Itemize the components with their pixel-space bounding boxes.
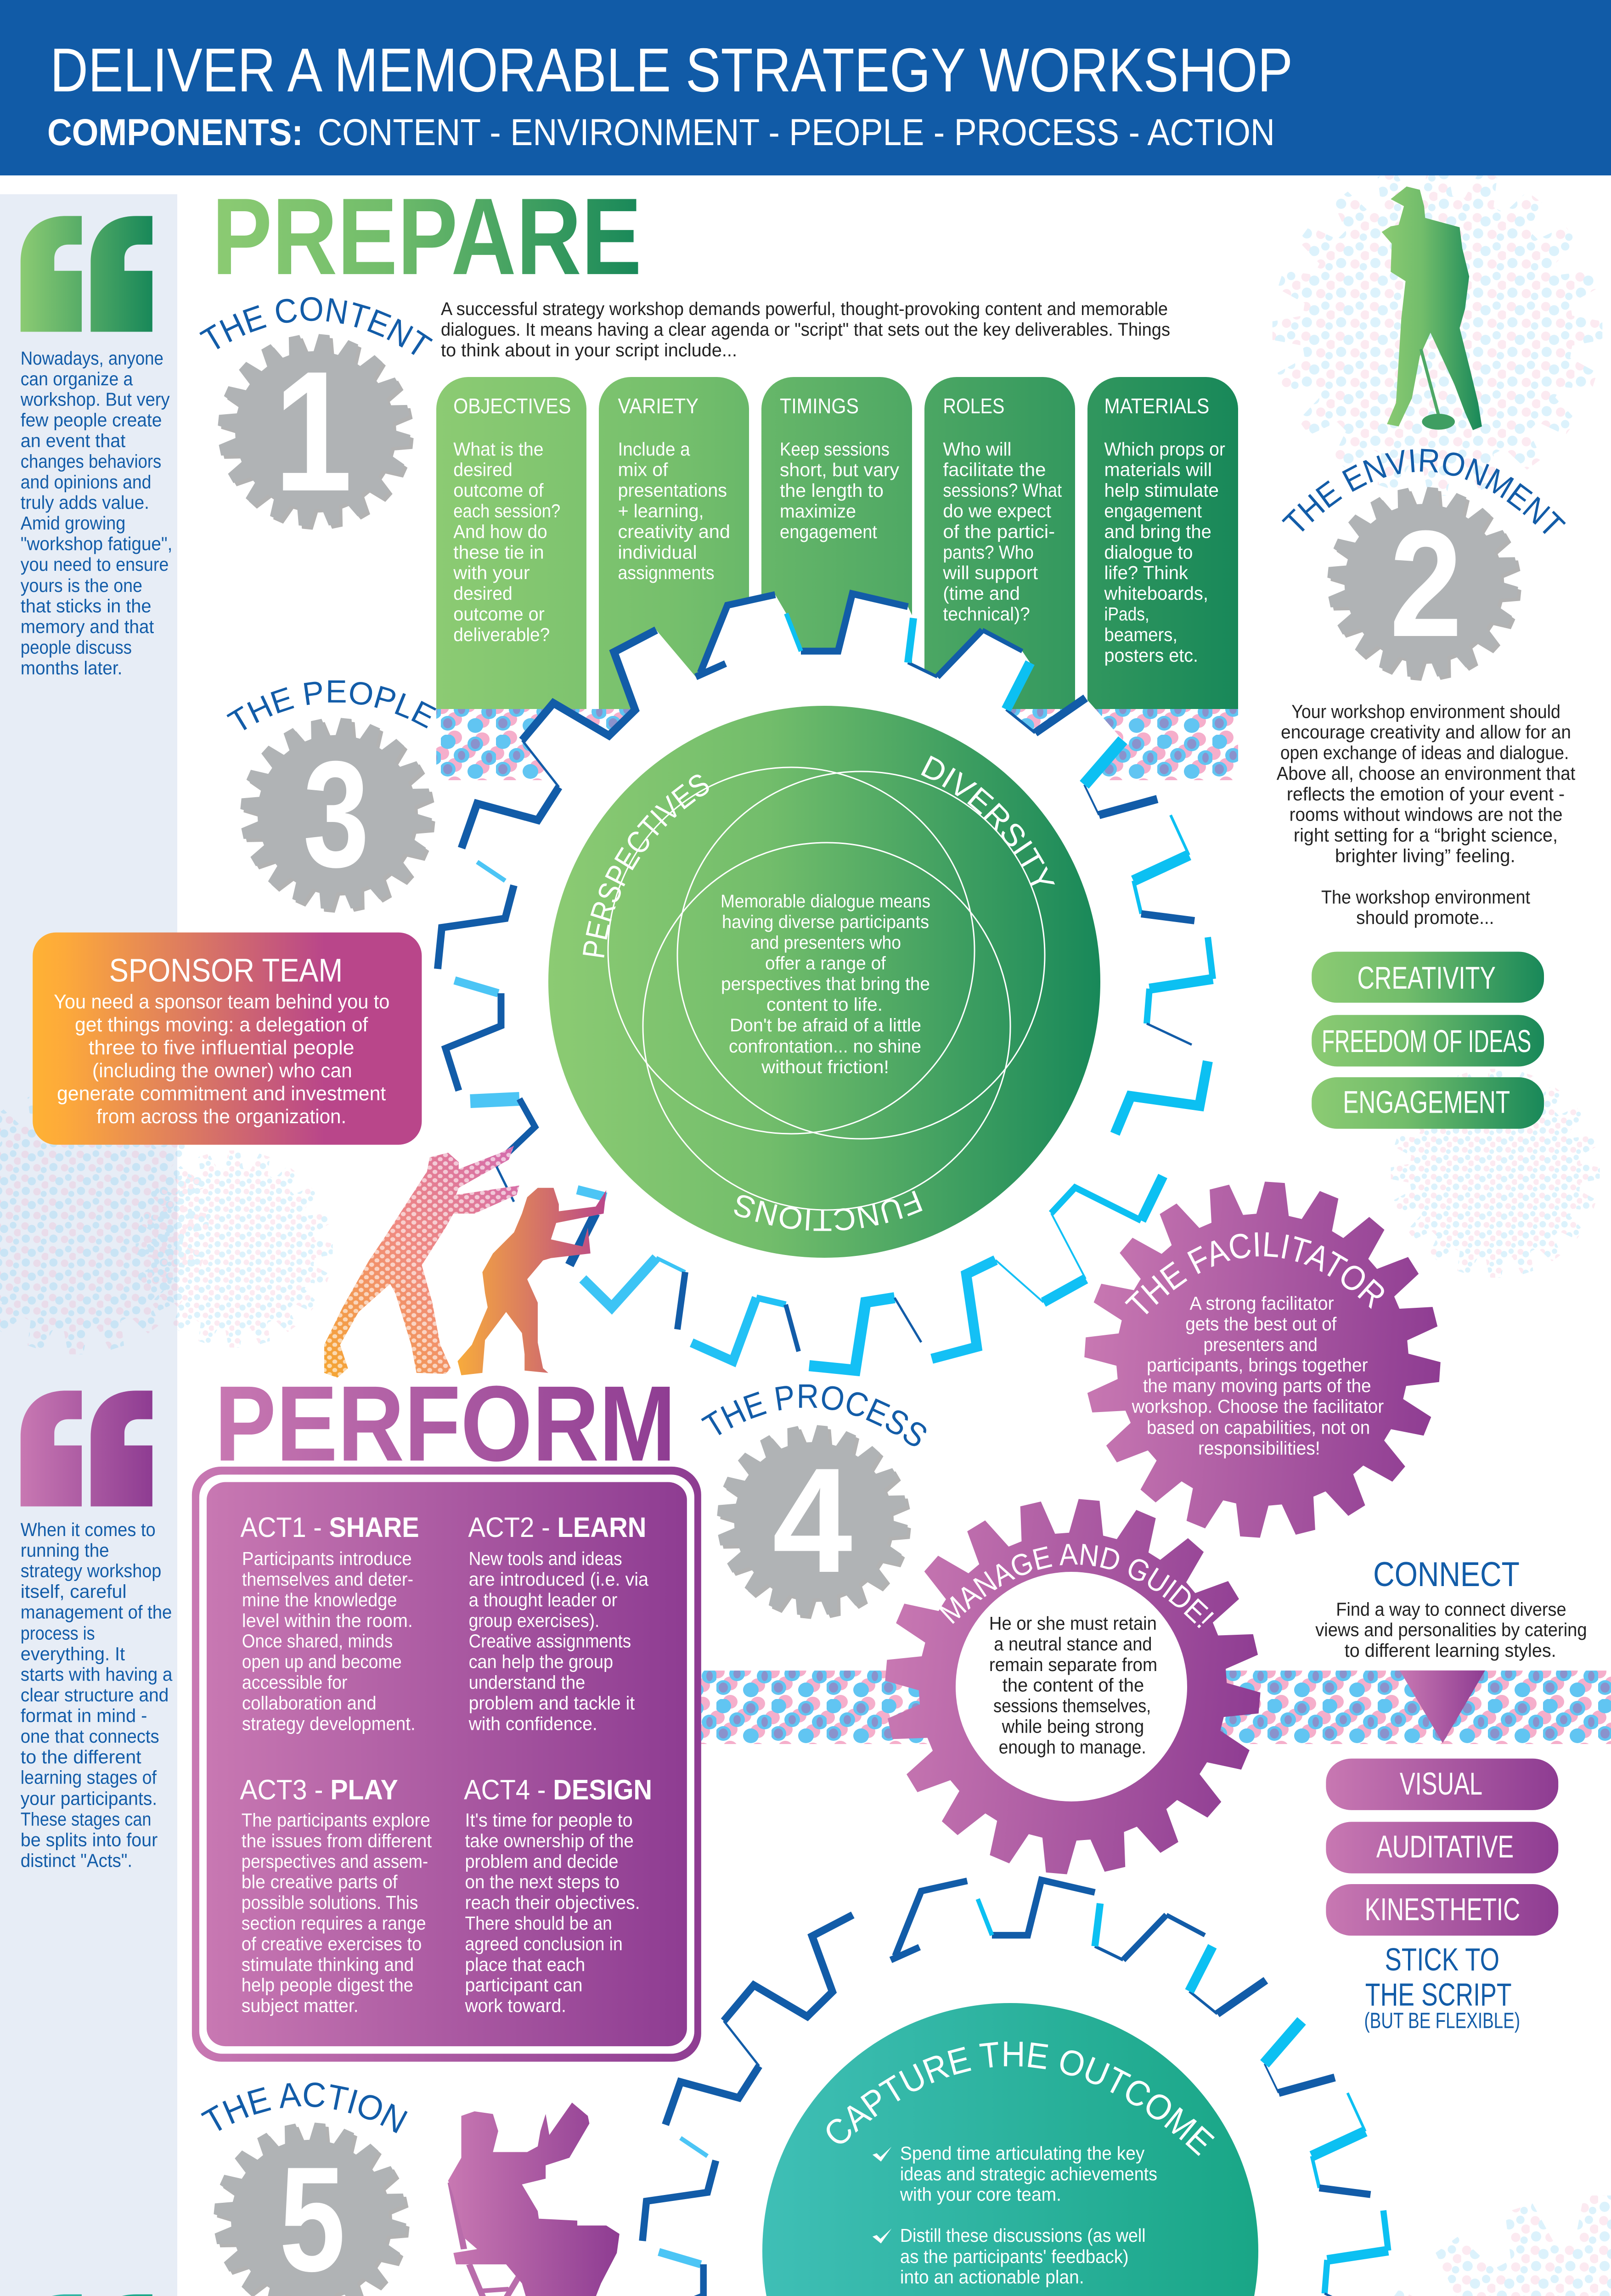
stick to the script (1364, 1941, 1520, 2033)
circle body text (721, 891, 930, 1077)
silhouette: pushing man (dotted) (324, 1146, 519, 1378)
prepare sidebar text: memory and that (21, 617, 154, 637)
prepare sidebar text: few people create (21, 410, 162, 431)
prepare sidebar text: and opinions and (21, 472, 151, 493)
manage and guide gear: the content of the (1003, 1675, 1144, 1696)
act 2: can help the group (469, 1652, 613, 1672)
act 3 (240, 1774, 432, 2016)
act 4: take ownership of the (465, 1831, 634, 1851)
pill: creativity: CREATIVITY (1357, 961, 1496, 996)
card: variety: VARIETY (618, 395, 698, 418)
card: variety: assignments (618, 563, 715, 584)
card: materials: Which props or (1104, 439, 1225, 460)
silhouette: man on director chair (448, 2103, 620, 2296)
card: materials: help stimulate (1104, 480, 1219, 501)
silhouette: pushing woman (457, 1188, 606, 1375)
sponsor team box: three to five influential people (89, 1036, 354, 1058)
checklist: into an actionable plan. (900, 2266, 1084, 2288)
circle body text: having diverse participants (722, 912, 929, 932)
checklist: Spend time articulating the key (900, 2143, 1144, 2164)
big green circle: the people (548, 706, 1100, 1258)
pill: engagement: ENGAGEMENT (1343, 1085, 1510, 1120)
card: objectives: with your (453, 563, 530, 584)
circle body text: offer a range of (765, 953, 886, 974)
heading: prepare: PREPARE (212, 175, 642, 298)
card: timings: engagement (780, 521, 878, 542)
act 4: reach their objectives. (465, 1892, 640, 1913)
prepare sidebar text (20, 348, 172, 679)
facilitator gear: the many moving parts of the (1143, 1376, 1371, 1396)
act 1: level within the room. (242, 1610, 413, 1631)
perform sidebar text: be splits into four (21, 1830, 158, 1851)
header banner (0, 0, 1611, 175)
checklist: ideas and strategic achievements (900, 2163, 1157, 2184)
facilitator gear: gets the best out of (1185, 1314, 1337, 1334)
perform sidebar text (21, 1519, 173, 1871)
prepare sidebar text: truly adds value. (21, 492, 149, 513)
perform sidebar text: to the different (21, 1747, 141, 1767)
card: roles: of the partici- (943, 522, 1055, 542)
card: timings: short, but vary (780, 459, 899, 480)
pill: creativity (1312, 951, 1544, 1003)
card: objectives: And how do (453, 522, 547, 542)
card: objectives: these tie in (453, 542, 544, 563)
facilitator gear (1073, 1170, 1452, 1549)
left sidebar panel (0, 194, 177, 2296)
act 3: ble creative parts of (242, 1872, 398, 1893)
act 4: problem and decide (465, 1851, 619, 1872)
card: objectives: outcome or (453, 604, 545, 625)
act 4: work toward. (465, 1996, 566, 2016)
stick to the script: THE SCRIPT (1365, 1977, 1512, 2012)
card: roles: ROLES (943, 395, 1004, 418)
circle body text: without friction! (761, 1057, 889, 1077)
card: materials: and bring the (1104, 522, 1211, 542)
intro text (441, 299, 1170, 360)
sponsor team box: get things moving: a delegation of (75, 1013, 368, 1035)
gear 4: the process: THE PROCESS (697, 1377, 935, 1456)
prepare sidebar text: Nowadays, anyone (21, 348, 163, 369)
card: objectives: deliverable? (453, 625, 550, 645)
facilitator gear: responsibilities! (1198, 1438, 1320, 1459)
card: timings: maximize (780, 501, 856, 522)
prepare sidebar text: changes behaviors (21, 451, 161, 472)
purple quote mark (21, 1390, 152, 1506)
manage and guide gear (870, 1484, 1276, 1890)
pill: kinesthetic (1326, 1884, 1558, 1936)
act 4: There should be an (465, 1913, 612, 1934)
perform sidebar text: clear structure and (21, 1685, 169, 1705)
act 2: group exercises). (469, 1610, 599, 1631)
heading on arc: CAPTURE THE OUTCOME (816, 2034, 1222, 2163)
gear 2: the environment: 2 (1390, 499, 1462, 668)
act 3: of creative exercises to (242, 1934, 422, 1954)
act 1: ACT1 - SHARE (240, 1512, 419, 1543)
gear 2: the environment (1277, 442, 1571, 690)
card: objectives (436, 377, 586, 709)
perform sidebar text: process is (21, 1623, 95, 1644)
act 4: agreed conclusion in (465, 1934, 623, 1954)
manage and guide gear: MANAGE AND GUIDE! (933, 1537, 1221, 1635)
heading: perform: PERFORM (214, 1363, 676, 1483)
act 1: mine the knowledge (242, 1590, 397, 1610)
perform acts panel (192, 1467, 701, 2062)
card: materials: whiteboards, (1104, 584, 1208, 604)
card: roles: technical)? (943, 604, 1030, 625)
gear 3: the people (222, 674, 445, 922)
environment text: right setting for a “bright science, (1294, 825, 1558, 846)
card: roles: pants? Who (943, 542, 1034, 563)
perform sidebar text: your participants. (21, 1789, 157, 1809)
checklist: with your core team. (900, 2184, 1061, 2205)
pill: engagement (1312, 1077, 1544, 1129)
act 3: section requires a range (242, 1913, 426, 1934)
facilitator gear: presenters and (1204, 1334, 1318, 1355)
connect block (1315, 1555, 1587, 2033)
act 3: ACT3 - PLAY (240, 1774, 398, 1806)
label: perspectives: PERSPECTIVES (576, 766, 716, 961)
act 1: Participants introduce (242, 1548, 412, 1570)
sponsor team box: from across the organization. (96, 1105, 346, 1127)
act 2: are introduced (i.e. via (469, 1569, 649, 1590)
environment pills (1312, 951, 1544, 1129)
perform sidebar text: everything. It (21, 1644, 125, 1665)
manage and guide gear: remain separate from (989, 1654, 1157, 1675)
card: objectives: outcome of (453, 480, 544, 501)
environment text: brighter living” feeling. (1335, 846, 1515, 867)
card: materials: materials will (1104, 460, 1212, 480)
card: timings: TIMINGS (780, 394, 859, 418)
facilitator gear: THE FACILITATOR (1119, 1225, 1393, 1326)
pill: freedom of ideas (1312, 1015, 1544, 1066)
teal quote mark (21, 2294, 152, 2296)
gear 3: the people: 3 (303, 729, 369, 899)
act 2 (468, 1512, 649, 1734)
sponsor team box: (including the owner) who can (92, 1059, 352, 1081)
prepare sidebar text: that sticks in the (21, 596, 151, 617)
card: roles: facilitate the (943, 460, 1046, 480)
connect text: to different learning styles. (1345, 1641, 1556, 1661)
act 4: place that each (465, 1954, 585, 1975)
title: DELIVER A MEMORABLE STRATEGY WORKSHOP (50, 35, 1293, 105)
card: materials (1087, 377, 1238, 709)
big gear outline: capture the outcome (642, 1880, 1388, 2296)
checklist: as the participants' feedback) (900, 2246, 1129, 2267)
silhouette: man with microphone (1382, 186, 1482, 430)
act 1: Once shared, minds (242, 1631, 393, 1652)
intro text: A successful strategy workshop demands powerful, thought-provoking content and memorable (441, 299, 1168, 319)
label: diversity: DIVERSITY (915, 748, 1061, 897)
perform sidebar text: management of the (21, 1602, 172, 1623)
sponsor team box (33, 933, 422, 1145)
facilitator gear: A strong facilitator (1190, 1293, 1334, 1314)
card: variety: presentations (618, 480, 727, 501)
act 2: problem and tackle it (469, 1693, 635, 1714)
act 3: subject matter. (242, 1996, 359, 2016)
environment text: rooms without windows are not the (1290, 805, 1562, 825)
pill: auditative: AUDITATIVE (1376, 1829, 1514, 1864)
perform sidebar text: itself, careful (21, 1581, 127, 1602)
connect text (1315, 1599, 1587, 1661)
act 1: themselves and deter- (242, 1569, 413, 1590)
capture the outcome circle (762, 2003, 1258, 2296)
act 1 (240, 1512, 419, 1734)
subtitle: CONTENT - ENVIRONMENT - PEOPLE - PROCESS - ACTION (318, 112, 1275, 153)
perform sidebar text: starts with having a (21, 1664, 173, 1685)
perform sidebar text: These stages can (21, 1809, 151, 1830)
card: roles: Who will (943, 439, 1011, 460)
card: timings: the length to (780, 480, 884, 501)
act 3: stimulate thinking and (242, 1954, 414, 1975)
card: variety: + learning, (618, 501, 704, 522)
gear 4: the process: 4 (772, 1437, 853, 1604)
act 4 (464, 1774, 652, 2016)
pill: kinesthetic: KINESTHETIC (1365, 1892, 1520, 1927)
act 2: with confidence. (468, 1714, 597, 1734)
act 2: Creative assignments (469, 1631, 631, 1652)
act 3: The participants explore (242, 1810, 430, 1831)
act 4: participant can (465, 1975, 583, 1996)
act 2: understand the (469, 1672, 585, 1693)
card: roles: sessions? What (943, 480, 1062, 501)
card: timings: Keep sessions (780, 439, 890, 460)
prepare sidebar text: people discuss (21, 637, 132, 658)
manage and guide gear: He or she must retain (989, 1613, 1157, 1634)
card: materials: posters etc. (1104, 645, 1198, 666)
gear 1: the content: THE CONTENT (195, 290, 438, 366)
act 3: perspectives and assem- (242, 1851, 428, 1872)
perform sidebar text: running the (21, 1540, 109, 1561)
prepare sidebar text: workshop. But very (20, 389, 170, 410)
gear 3: the people: THE PEOPLE (222, 674, 441, 740)
card: objectives: desired (453, 460, 513, 480)
gear 4: the process (697, 1377, 935, 1628)
manage and guide gear: while being strong (1002, 1716, 1144, 1737)
act 3: help people digest the (242, 1975, 413, 1996)
perform sidebar text: learning stages of (21, 1767, 157, 1788)
circle body text: perspectives that bring the (721, 974, 930, 994)
act 1: collaboration and (242, 1693, 377, 1714)
act 1: accessible for (242, 1672, 348, 1693)
card: materials: beamers, (1104, 625, 1177, 645)
facilitator gear: workshop. Choose the facilitator (1132, 1396, 1384, 1417)
facilitator gear: based on capabilities, not on (1147, 1418, 1370, 1438)
pill: visual: VISUAL (1400, 1767, 1482, 1801)
checklist: Distill these discussions (as well (900, 2225, 1146, 2246)
act 2: a thought leader or (469, 1590, 617, 1610)
environment text: The workshop environment (1321, 887, 1530, 908)
gear 5: the action: THE ACTION (197, 2075, 413, 2142)
gear 2: the environment: THE ENVIRONMENT (1277, 442, 1571, 545)
act 2: New tools and ideas (469, 1548, 622, 1570)
circle body text: content to life. (766, 995, 883, 1015)
gear 1: the content (195, 290, 438, 539)
act 3: possible solutions. This (242, 1892, 418, 1913)
card: variety: creativity and (618, 522, 730, 542)
act 4: ACT4 - DESIGN (464, 1774, 652, 1806)
circle body text: confrontation... no shine (729, 1036, 921, 1057)
sponsor team box: generate commitment and investment (57, 1082, 386, 1104)
pill: auditative (1326, 1822, 1558, 1874)
card: roles: (time and (943, 584, 1020, 604)
circle body text: Don't be afraid of a little (730, 1015, 921, 1035)
act 1: open up and become (242, 1652, 402, 1672)
gear 5: the action (197, 2075, 419, 2296)
environment text (1277, 702, 1575, 929)
stick to the script: (BUT BE FLEXIBLE) (1364, 2008, 1520, 2033)
perform sidebar text: distinct "Acts". (21, 1851, 132, 1871)
card: objectives: each session? (453, 501, 560, 522)
act 3: the issues from different (242, 1831, 432, 1851)
card: objectives: desired (453, 583, 513, 604)
perform sidebar text: When it comes to (21, 1519, 156, 1540)
dotted stripe: perform (701, 1671, 1611, 1744)
perform sidebar text: strategy workshop (21, 1561, 161, 1581)
sponsor team box: SPONSOR TEAM (109, 952, 343, 989)
connect text: Find a way to connect diverse (1336, 1599, 1566, 1620)
perform sidebar text: format in mind - (21, 1705, 147, 1726)
prepare cards (436, 377, 1238, 709)
facilitator gear: participants, brings together (1147, 1355, 1368, 1376)
card: roles (924, 377, 1075, 709)
prepare sidebar text: can organize a (21, 369, 133, 389)
prepare sidebar text: yours is the one (21, 575, 142, 596)
card: objectives: OBJECTIVES (453, 395, 571, 418)
manage and guide gear: a neutral stance and (994, 1634, 1152, 1654)
connect heading: CONNECT (1373, 1555, 1520, 1594)
prepare sidebar text: months later. (21, 658, 122, 679)
checklist (873, 2143, 1157, 2296)
triangle pointer (1400, 1671, 1485, 1743)
prepare sidebar text: an event that (21, 431, 125, 451)
perform sidebar text: one that connects (21, 1726, 159, 1747)
card: variety (599, 377, 749, 709)
gear 1: the content: 1 (274, 336, 352, 527)
act 1: strategy development. (242, 1714, 416, 1734)
card: materials: dialogue to (1104, 542, 1193, 563)
card: variety: individual (618, 542, 697, 563)
green quote mark (21, 216, 152, 332)
act 4: on the next steps to (465, 1872, 620, 1893)
card: variety: mix of (618, 460, 668, 480)
venn circles (608, 767, 1045, 1210)
stick to the script: STICK TO (1385, 1941, 1499, 1977)
label: functions: FUNCTIONS (729, 1183, 927, 1238)
sponsor team box: You need a sponsor team behind you to (54, 990, 389, 1013)
manage and guide gear: enough to manage. (999, 1737, 1146, 1758)
prepare sidebar text: Amid growing (21, 513, 125, 534)
pill: visual (1326, 1759, 1558, 1810)
dotted stripe: prepare (436, 709, 1238, 780)
act 2: ACT2 - LEARN (468, 1512, 646, 1543)
subtitle: COMPONENTS: (47, 112, 303, 153)
manage and guide gear: sessions themselves, (993, 1696, 1151, 1716)
intro text: dialogues. It means having a clear agenda or "script" that sets out the key deliverables. Things (441, 320, 1170, 340)
act 4: It's time for people to (465, 1810, 633, 1831)
card: roles: do we expect (943, 501, 1051, 522)
card: roles: will support (942, 563, 1038, 584)
card: materials: iPads, (1104, 604, 1149, 625)
prepare sidebar text: "workshop fatigue", (21, 534, 172, 554)
environment text: reflects the emotion of your event - (1287, 784, 1565, 805)
intro text: to think about in your script include... (441, 340, 737, 360)
circle body text: and presenters who (750, 933, 901, 953)
card: timings (761, 377, 912, 709)
card: materials: MATERIALS (1104, 395, 1209, 418)
environment text: should promote... (1356, 908, 1494, 929)
big gear outline: people (438, 594, 1213, 1370)
prepare sidebar text: you need to ensure (21, 554, 169, 575)
card: variety: Include a (618, 439, 690, 460)
card: objectives: What is the (453, 439, 544, 460)
card: materials: life? Think (1104, 563, 1188, 584)
circle body text: Memorable dialogue means (721, 891, 930, 912)
card: materials: engagement (1104, 501, 1202, 522)
